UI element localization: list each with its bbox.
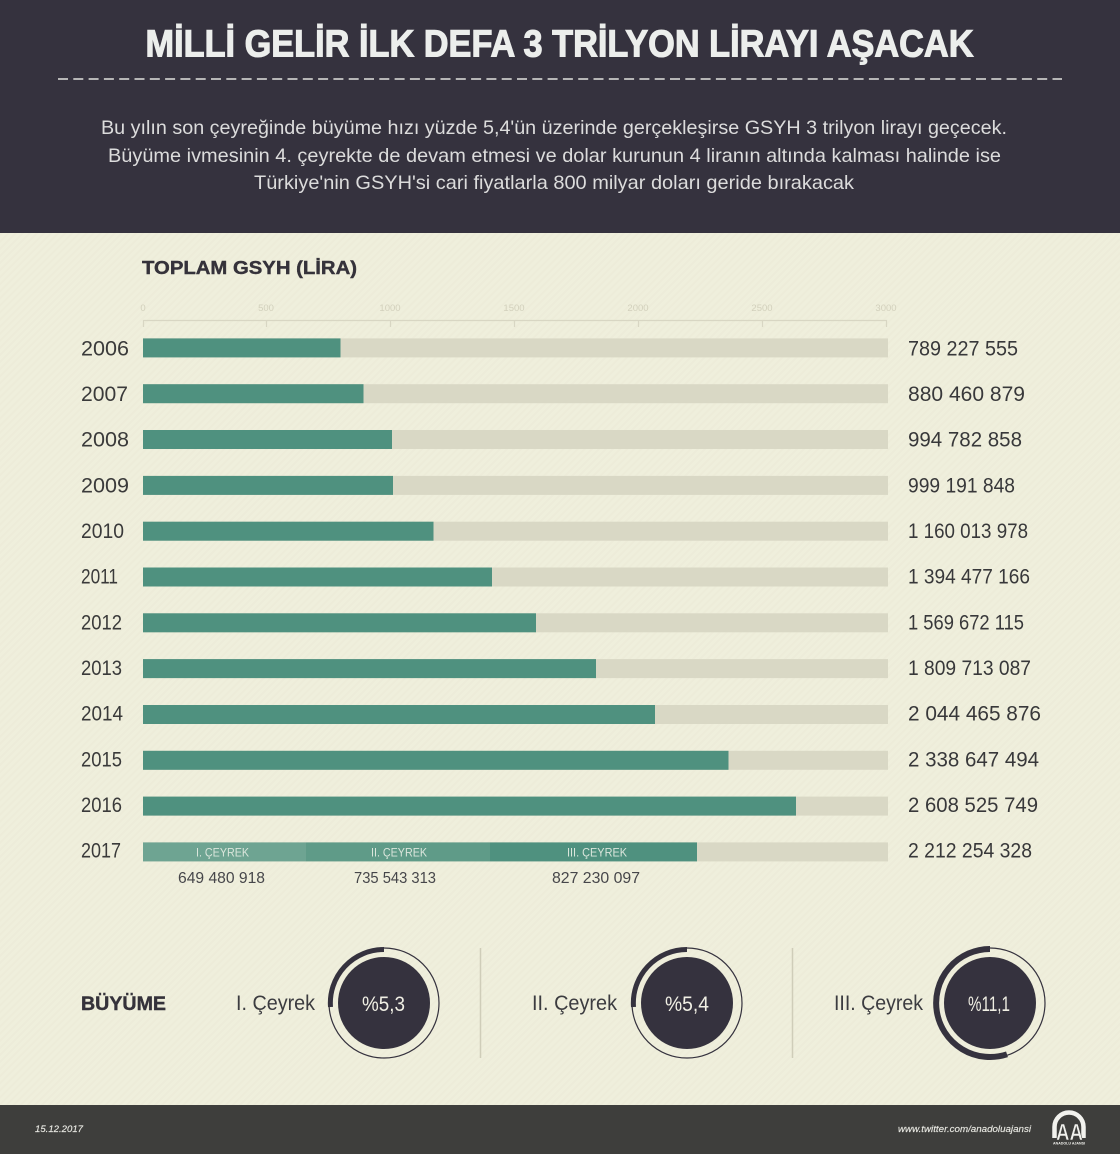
bar row: 2012: 2012: [81, 611, 122, 634]
bar row: 2012: [81, 611, 1024, 634]
growth gauge: second quarter: II. Çeyrek: [532, 992, 617, 1015]
bar row: 2008: [81, 429, 1022, 452]
bar chart: [81, 338, 1041, 887]
chart axis: 1500: [503, 303, 525, 314]
bar row: 2007: 2007: [81, 383, 128, 406]
date: 15.12.2017: [35, 1124, 84, 1135]
intro text: [101, 117, 1007, 194]
chart axis: 2500: [751, 303, 773, 314]
chart axis: 0: [140, 303, 146, 314]
intro text: Bu yılın son çeyreğinde büyüme hızı yüzde 5,4'ün üzerinde gerçekleşirse GSYH 3 trilyon lirayı geçecek.: [101, 117, 1007, 139]
source link text: www.twitter.com/anadoluajansi: [898, 1124, 1032, 1135]
bar row: 2010: [81, 520, 1028, 543]
bar row: 2007: [81, 383, 1025, 406]
bar row: 2017 quarters: 649 480 918: [178, 870, 265, 887]
chart axis: 2000: [627, 303, 649, 314]
growth gauge: first quarter: [236, 948, 439, 1058]
bar row: 2017 quarters: 2 212 254 328: [908, 840, 1032, 862]
bar row: 2014: 2 044 465 876: [908, 703, 1041, 726]
bar row: 2017 quarters: III. ÇEYREK: [567, 848, 627, 860]
bar row: 2008: 2008: [81, 429, 129, 452]
chart heading: TOPLAM GSYH (LİRA): [142, 258, 357, 278]
chart axis: [140, 303, 897, 327]
growth gauge: third quarter: [834, 948, 1045, 1058]
icon: Anadolu Agency logo: AA: [1056, 1119, 1083, 1145]
bar row: 2017 quarters: 827 230 097: [552, 870, 640, 887]
bar row: 2008: 994 782 858: [908, 429, 1022, 452]
bar row: 2012: 1 569 672 115: [908, 611, 1024, 634]
bar row: 2015: 2 338 647 494: [908, 748, 1039, 771]
bar row: 2017 quarters: I. ÇEYREK: [196, 848, 249, 860]
bar row: 2017 quarters: [81, 840, 1032, 887]
bar row: 2007: 880 460 879: [908, 383, 1025, 406]
bar row: 2011: 1 394 477 166: [908, 566, 1030, 589]
bar row: 2010: 1 160 013 978: [908, 520, 1028, 543]
bar row: 2006: [81, 338, 1018, 360]
bar row: 2010: 2010: [81, 520, 124, 543]
bar row: 2016: 2016: [81, 794, 122, 817]
bar row: 2009: 2009: [81, 474, 129, 497]
bar row: 2009: [81, 474, 1015, 497]
growth heading: BÜYÜME: [81, 992, 166, 1015]
growth gauge: first quarter: I. Çeyrek: [236, 992, 315, 1015]
bar row: 2011: 2011: [81, 566, 118, 589]
bar row: 2006: 789 227 555: [908, 338, 1018, 360]
bar row: 2015: 2015: [81, 748, 122, 771]
icon: Anadolu Agency logo: ANADOLU AJANSI: [1053, 1142, 1085, 1146]
growth gauge: first quarter: %5,3: [362, 993, 405, 1016]
panel: header: [0, 0, 1120, 233]
growth gauge: second quarter: %5,4: [665, 993, 709, 1016]
bar row: 2014: 2014: [81, 703, 123, 726]
intro text: Türkiye'nin GSYH'si cari fiyatlarla 800 milyar doları geride bırakacak: [254, 172, 854, 194]
bar row: 2009: 999 191 848: [908, 474, 1015, 497]
bar row: 2017 quarters: 735 543 313: [354, 870, 436, 887]
bar row: 2016: [81, 794, 1038, 817]
chart axis: 500: [258, 303, 274, 314]
bar row: 2015: [81, 748, 1039, 771]
growth gauge: second quarter: [532, 948, 742, 1058]
intro text: Büyüme ivmesinin 4. çeyrekte de devam etmesi ve dolar kurunun 4 liranın altında kalması halinde ise: [108, 145, 1001, 167]
panel: footer: [0, 1105, 1120, 1154]
bar row: 2017 quarters: II. ÇEYREK: [371, 848, 427, 860]
bar row: 2016: 2 608 525 749: [908, 794, 1038, 817]
title: MİLLİ GELİR İLK DEFA 3 TRİLYON LİRAYI AŞACAK: [146, 24, 974, 66]
bar row: 2014: [81, 703, 1041, 726]
chart axis: 3000: [875, 303, 897, 314]
growth gauge: third quarter: %11,1: [968, 993, 1010, 1016]
bar row: 2013: 1 809 713 087: [908, 657, 1031, 680]
bar row: 2013: [81, 657, 1031, 680]
chart axis: 1000: [379, 303, 401, 314]
bar row: 2011: [81, 566, 1030, 589]
bar row: 2013: 2013: [81, 657, 122, 680]
bar row: 2017 quarters: 2017: [81, 840, 121, 862]
icon: Anadolu Agency logo: [1053, 1112, 1085, 1146]
growth gauge: third quarter: III. Çeyrek: [834, 992, 923, 1015]
bar row: 2006: 2006: [81, 338, 129, 360]
